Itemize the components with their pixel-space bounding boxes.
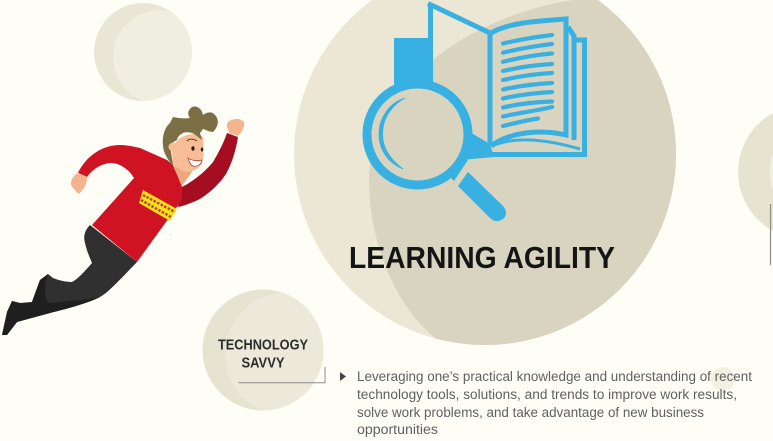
sweater badge (139, 190, 177, 221)
smile (188, 158, 202, 166)
icon: blue block behind magnifier (394, 38, 433, 88)
connector line (238, 367, 325, 383)
heading: technology savvy: TECHNOLOGY (218, 338, 308, 354)
eye (191, 146, 195, 151)
title: LEARNING AGILITY (349, 240, 615, 275)
heading: technology savvy: SAVVY (242, 356, 285, 372)
far eye (201, 148, 203, 152)
far arm (178, 133, 238, 207)
icon: open book (428, 4, 584, 154)
panel: technology savvy circle (202, 290, 324, 410)
hair (163, 106, 218, 165)
red sweater torso and arm (78, 145, 182, 262)
raised fist (227, 119, 244, 136)
text block: description: opportunities (357, 422, 438, 437)
main circle backdrop (294, 0, 700, 345)
text block: description: technology tools, solutions, and trends to improve work results, (357, 387, 737, 402)
decorative faint circle (711, 367, 735, 391)
icon: book and magnifying glass (367, 4, 584, 221)
eyebrow (187, 139, 197, 141)
text block: description: Leveraging one’s practical knowledge and understanding of recent (357, 369, 752, 384)
trousers (2, 225, 137, 335)
lowered hand (71, 173, 87, 194)
text block: description (357, 369, 752, 437)
icon: magnifying glass (367, 84, 506, 221)
lower leg shade (2, 274, 100, 335)
face (172, 134, 204, 172)
text block: description: solve work problems, and take advantage of new business (357, 405, 704, 420)
right edge line (770, 204, 772, 265)
icon: page text lines (503, 35, 552, 126)
illustration: flying man in red sweater (2, 106, 244, 335)
ear (168, 142, 178, 152)
decorative circle: right edge (738, 113, 773, 231)
bullet arrow (340, 372, 346, 381)
decorative circle: top left (94, 3, 192, 101)
heading: technology savvy (218, 338, 308, 372)
neck (172, 160, 192, 187)
